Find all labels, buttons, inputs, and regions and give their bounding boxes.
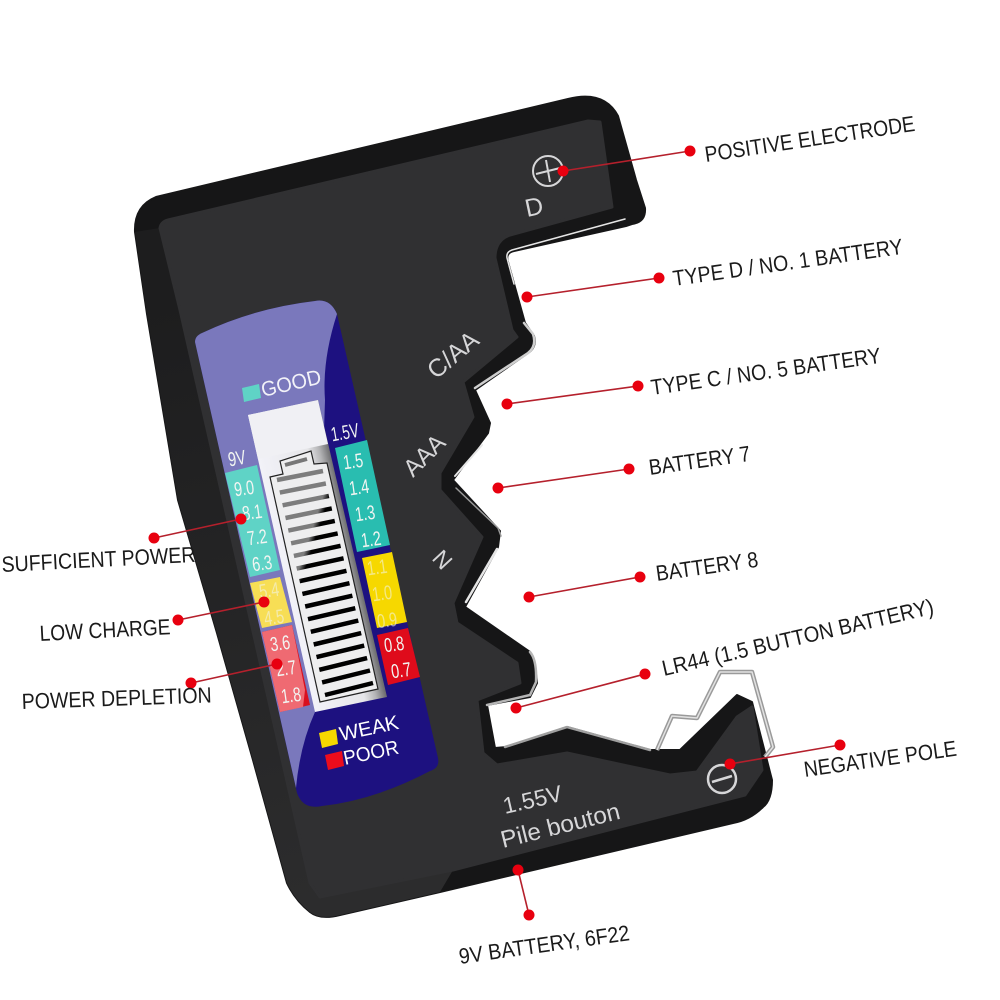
callout: sufficient power xyxy=(148,514,246,544)
display panel xyxy=(195,301,438,807)
callout: battery 8 xyxy=(524,572,646,602)
label: power depletion: POWER DEPLETION xyxy=(21,682,212,714)
battery tester device xyxy=(135,97,773,917)
label: low charge: LOW CHARGE xyxy=(39,614,171,646)
1.5V scale values: 1.3 xyxy=(354,500,377,526)
9V scale values: 2.7 xyxy=(275,655,298,681)
silver notch edge highlights xyxy=(455,219,650,750)
negative spring contact xyxy=(657,672,773,757)
1.5V poor segment xyxy=(377,628,420,685)
callout: negative pole xyxy=(724,740,846,770)
9V scale values: 8.1 xyxy=(241,499,264,525)
N slot mark: N xyxy=(427,545,458,575)
9V scale values xyxy=(233,475,303,708)
1.5V scale label: 1.5V xyxy=(329,419,361,446)
callout: power depletion xyxy=(186,658,282,688)
callout: 9V battery xyxy=(512,864,534,920)
1.5V scale values: 1.1 xyxy=(366,554,389,580)
callout: positive electrode xyxy=(558,146,696,176)
9V scale values: 3.6 xyxy=(269,630,292,656)
good legend: GOOD xyxy=(259,366,324,402)
left bevel band xyxy=(135,228,453,917)
label: battery 8: BATTERY 8 xyxy=(654,547,760,586)
9V poor segment xyxy=(262,625,310,712)
weak legend: WEAK xyxy=(337,712,401,746)
device top face xyxy=(160,121,762,897)
LCD window xyxy=(248,400,387,712)
callout: low charge xyxy=(172,596,270,626)
callout: battery 7 xyxy=(492,464,634,494)
battery level icon xyxy=(270,451,378,702)
D slot mark: D xyxy=(522,192,546,223)
device body outline xyxy=(135,97,772,917)
1.5V scale values xyxy=(342,448,413,683)
9V scale values: 1.8 xyxy=(280,682,303,708)
9V weak segment xyxy=(250,577,292,628)
callout: type D xyxy=(522,272,664,302)
9V scale values: 6.3 xyxy=(251,550,274,576)
1.5V scale values: 1.0 xyxy=(371,580,394,606)
button cell text: 1.55V xyxy=(500,780,565,819)
label: type D: TYPE D / NO. 1 BATTERY xyxy=(671,234,905,291)
panel lavender overlay xyxy=(195,301,337,788)
label: battery 7: BATTERY 7 xyxy=(647,441,752,480)
1.5V scale values: 0.7 xyxy=(390,657,413,683)
label: negative pole: NEGATIVE POLE xyxy=(802,736,958,782)
label: 9V battery: 9V BATTERY, 6F22 xyxy=(457,920,631,969)
positive symbol xyxy=(533,156,563,186)
1.5V good segment xyxy=(335,440,390,552)
label: type C: TYPE C / NO. 5 BATTERY xyxy=(649,343,883,400)
label: positive electrode: POSITIVE ELECTRODE xyxy=(703,111,916,167)
callout: LR44 xyxy=(510,668,650,714)
callout lines and dots xyxy=(148,146,846,920)
1.5V scale values: 1.5 xyxy=(342,448,365,474)
battery outline xyxy=(270,451,378,702)
9V scale values: 9.0 xyxy=(233,475,256,501)
panel navy base xyxy=(195,301,438,807)
1.5V scale values: 1.2 xyxy=(360,526,383,552)
1.5V weak segment xyxy=(362,552,407,628)
label: sufficient power: SUFFICIENT POWER xyxy=(1,542,196,577)
button cell text: Pile bouton xyxy=(498,798,623,854)
9V good segment xyxy=(225,465,280,577)
9V scale label: 9V xyxy=(226,445,248,471)
AAA slot mark: AAA xyxy=(398,429,451,482)
callout: type C xyxy=(502,380,644,410)
1.5V scale values: 1.4 xyxy=(348,474,371,500)
label: LR44: LR44 (1.5 BUTTON BATTERY) xyxy=(660,594,936,681)
negative symbol xyxy=(708,765,736,793)
C/AA slot mark: C/AA xyxy=(422,325,485,385)
poor legend: POOR xyxy=(341,737,401,770)
battery level bars xyxy=(277,471,373,695)
9V scale values: 7.2 xyxy=(246,524,269,550)
9V scale values: 5.4 xyxy=(258,577,281,603)
battery nub bar xyxy=(285,459,307,465)
1.5V scale values: 0.9 xyxy=(376,607,399,633)
1.5V scale values: 0.8 xyxy=(383,631,406,657)
9V scale values: 4.5 xyxy=(263,604,286,630)
LCD window upper area xyxy=(248,400,328,459)
